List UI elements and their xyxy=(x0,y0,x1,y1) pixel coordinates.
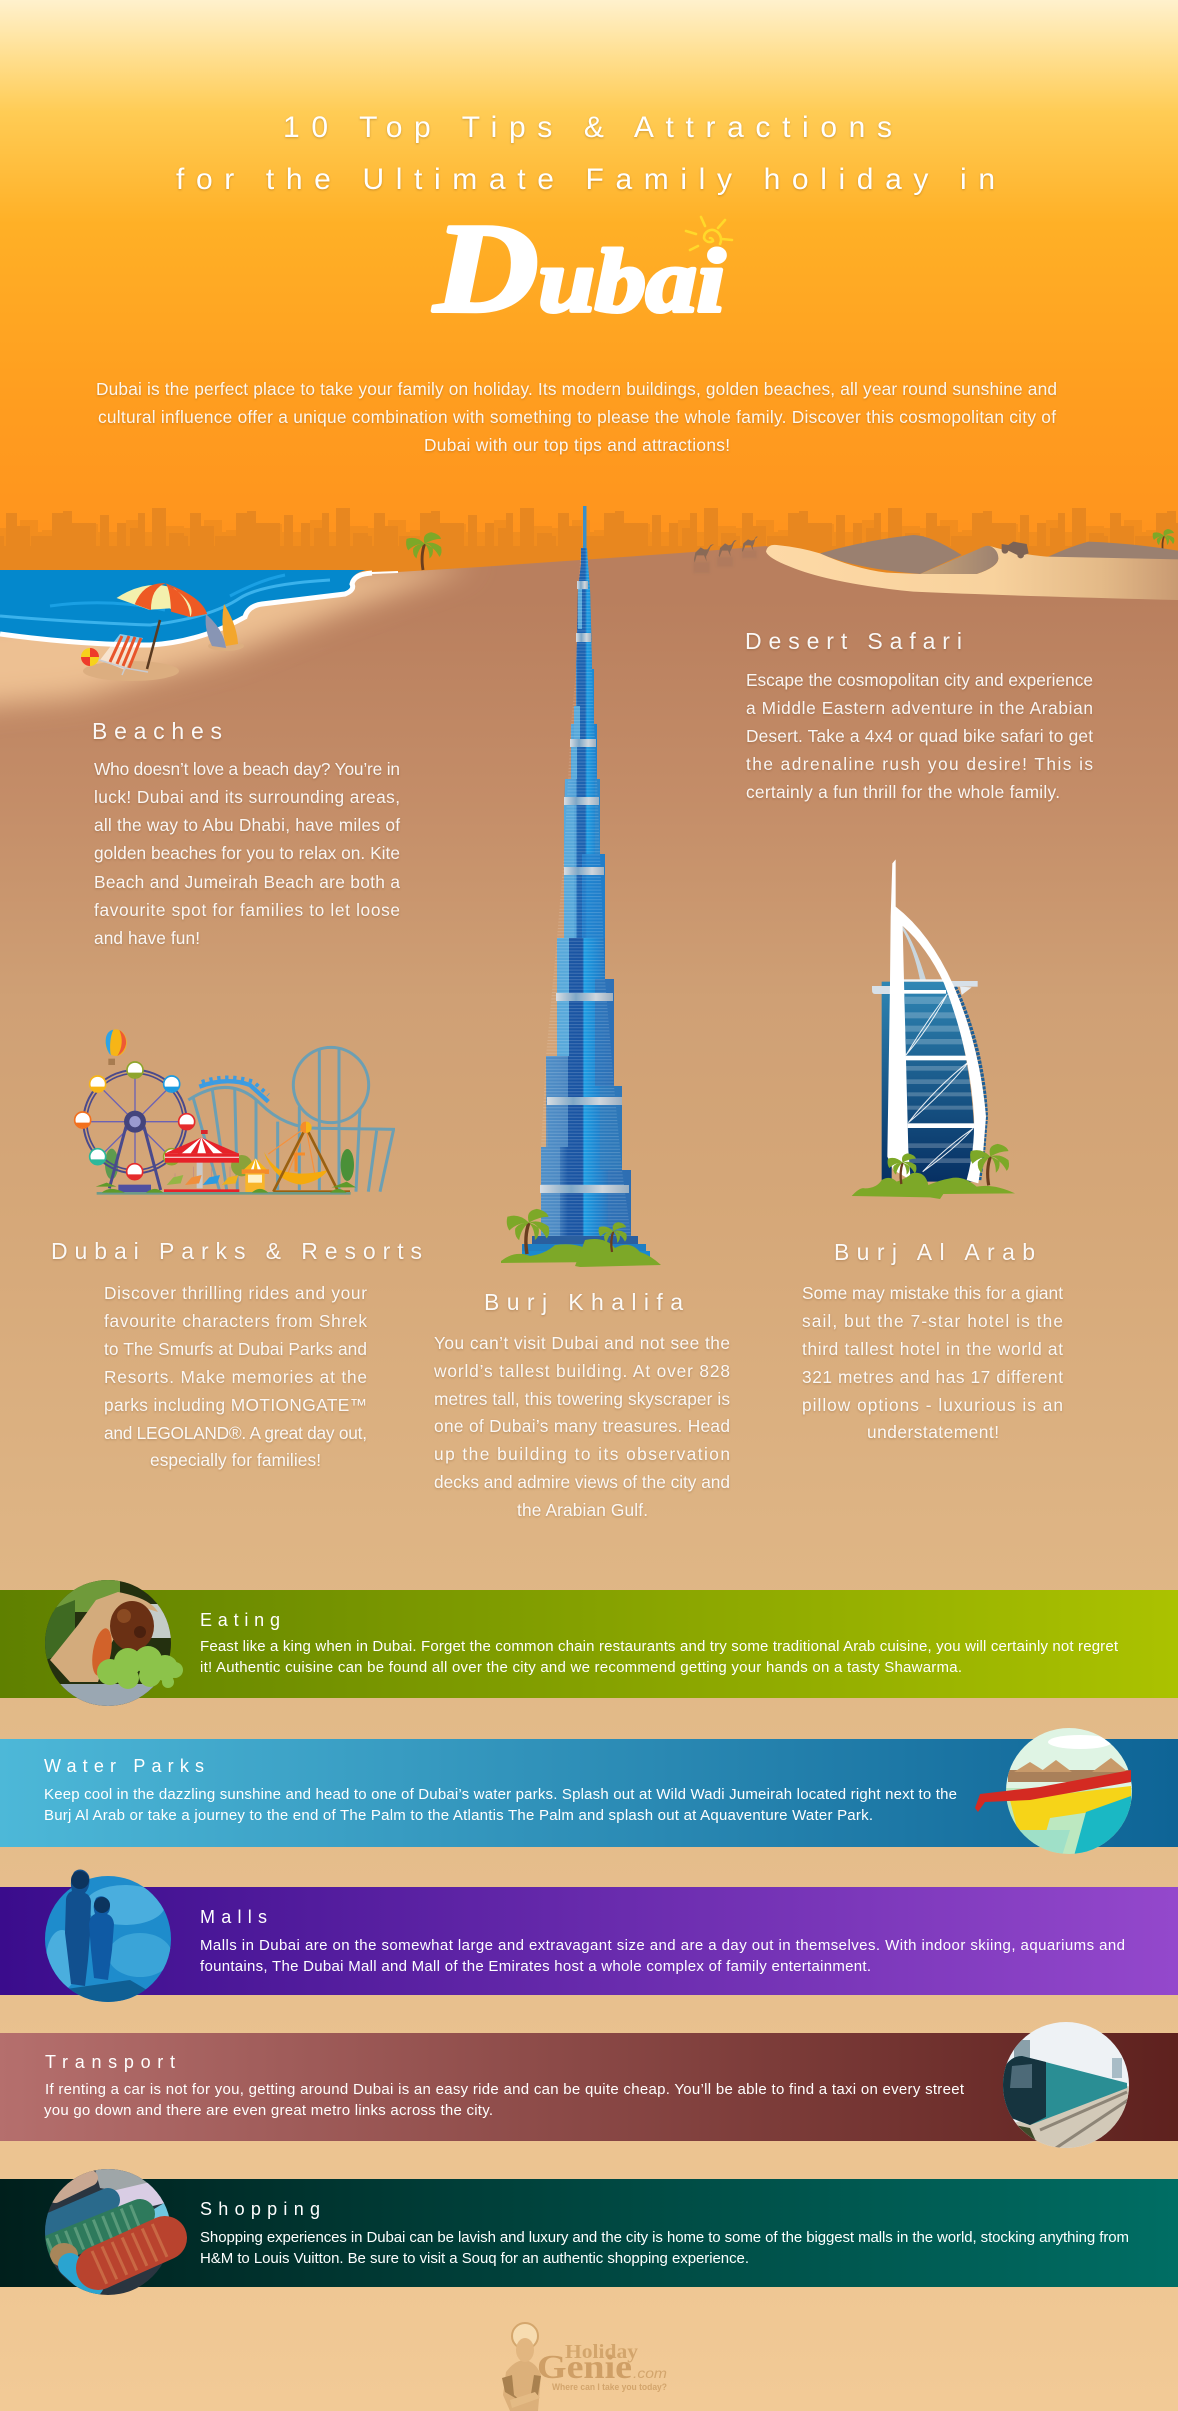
panel: Shopping xyxy=(0,2169,1178,2297)
section: Burj Khalifa: world’s tallest building. At over 828 xyxy=(433,1361,730,1381)
Transport title: Transport xyxy=(45,2052,175,2072)
section: Dubai Parks & Resorts: favourite characters from Shrek xyxy=(104,1311,367,1331)
Water Parks text: Keep cool in the dazzling sunshine and head to one of Dubai’s water parks. Splash out at Wild Wadi Jumeirah located right next to the xyxy=(44,1786,957,1803)
illustration: Burj Khalifa xyxy=(501,506,661,1267)
icon: genie xyxy=(502,2323,541,2411)
Malls text xyxy=(200,1937,1125,1975)
photo: metro train xyxy=(1000,2020,1135,2150)
section: Dubai Parks & Resorts: Dubai Parks & Resorts xyxy=(51,1238,422,1264)
photo: rolled fabrics xyxy=(45,2169,171,2297)
mountains xyxy=(820,535,1178,574)
carousel xyxy=(164,1130,239,1193)
section: Burj Khalifa: You can’t visit Dubai and not see the xyxy=(434,1333,730,1353)
intro text: cultural influence offer a unique combination with something to please the whole family. Discover this cosmopolitan city of xyxy=(98,407,1056,427)
light beach sand xyxy=(0,562,475,712)
Transport text xyxy=(44,2081,965,2119)
ticket booth xyxy=(242,1158,269,1193)
photo: water slides xyxy=(975,1728,1133,1856)
ground and shrubs xyxy=(96,1182,356,1195)
sand ground xyxy=(0,546,1178,2411)
sand dune xyxy=(766,545,1178,600)
section: Beaches: luck! Dubai and its surrounding areas, xyxy=(94,787,400,807)
section: Burj Al Arab: pillow options - luxurious is an xyxy=(802,1395,1063,1415)
Water Parks title: Water Parks xyxy=(44,1756,204,1776)
Eating text: it! Authentic cuisine can be found all over the city and we recommend getting your hands on a tasty Shawarma. xyxy=(200,1659,962,1676)
section: Burj Al Arab xyxy=(802,1239,1063,1442)
icon: jeep xyxy=(1002,542,1029,558)
logo text: .com xyxy=(633,2365,667,2381)
section: Beaches: golden beaches for you to relax on. Kite xyxy=(94,843,400,863)
section: Burj Khalifa: one of Dubai’s many treasures. Head xyxy=(434,1416,730,1436)
city skyline xyxy=(0,500,1178,590)
ferris wheel xyxy=(75,1062,195,1192)
Transport text: If renting a car is not for you, getting around Dubai is an easy ride and can be quite cheap. You’ll be able to find a taxi on every street xyxy=(45,2081,965,2098)
section: Burj Al Arab: 321 metres and has 17 different xyxy=(802,1367,1063,1387)
main title: 10 Top Tips & Attractions xyxy=(283,111,892,144)
intro text xyxy=(96,379,1057,455)
sky background xyxy=(0,0,1178,600)
main title: for the Ultimate Family holiday in xyxy=(176,163,995,196)
section: Burj Khalifa: decks and admire views of the city and xyxy=(434,1472,730,1492)
hot air balloon xyxy=(105,1029,127,1065)
section: Dubai Parks & Resorts: parks including MOTIONGATE™ xyxy=(104,1395,367,1415)
panel: Eating xyxy=(0,1580,1178,1708)
section: Burj Khalifa xyxy=(433,1289,730,1520)
Eating title: Eating xyxy=(200,1610,280,1630)
section: Desert Safari: a Middle Eastern adventure in the Arabian xyxy=(746,698,1093,718)
lettuce xyxy=(97,1646,183,1689)
section: Beaches: Beaches xyxy=(92,718,222,744)
logo text: Where can I take you today? xyxy=(552,2382,667,2392)
intro text: Dubai with our top tips and attractions! xyxy=(424,435,730,455)
Holiday Genie logo xyxy=(502,2323,667,2411)
camel reflections xyxy=(693,550,757,573)
section: Dubai Parks & Resorts: especially for families! xyxy=(150,1450,321,1470)
section: Beaches: Who doesn’t love a beach day? You’re in xyxy=(94,759,400,779)
pirate ship swing xyxy=(264,1122,350,1193)
photo: shawarma xyxy=(45,1580,183,1708)
beach scene: parasol, deck chair, ball and surfboards xyxy=(81,575,244,681)
Eating text: Feast like a king when in Dubai. Forget the common chain restaurants and try some traditional Arab cuisine, you will certainly not regret xyxy=(200,1638,1119,1655)
main title xyxy=(176,111,995,196)
illustration: theme park rides xyxy=(75,1029,395,1195)
section: Beaches xyxy=(92,718,400,948)
Dubai script wordmark: Dubai xyxy=(433,197,725,339)
section: Burj Khalifa: up the building to its observation xyxy=(434,1444,730,1464)
Shopping title: Shopping xyxy=(200,2199,320,2219)
Malls text: fountains, The Dubai Mall and Mall of the Emirates host a whole complex of family entertainment. xyxy=(200,1958,871,1975)
illustration: Burj Al Arab xyxy=(852,859,1015,1199)
logo text: Holiday xyxy=(565,2341,638,2363)
section: Dubai Parks & Resorts xyxy=(51,1238,422,1470)
intro text: Dubai is the perfect place to take your family on holiday. Its modern buildings, golden beaches, all year round sunshine and xyxy=(96,379,1057,399)
section: Burj Al Arab: understatement! xyxy=(867,1422,999,1442)
Malls title: Malls xyxy=(200,1907,267,1927)
trees xyxy=(105,1149,118,1179)
small dune xyxy=(920,546,998,574)
section: Dubai Parks & Resorts: and LEGOLAND®. A great day out, xyxy=(104,1423,367,1443)
section: Burj Khalifa: metres tall, this towering skyscraper is xyxy=(434,1389,730,1409)
desert: mountains, dunes, jeep and camels xyxy=(693,535,1178,600)
section: Desert Safari: certainly a fun thrill for the whole family. xyxy=(746,782,1060,802)
section: Desert Safari: Desert Safari xyxy=(745,628,962,654)
children silhouettes xyxy=(65,1869,114,1986)
Shopping text xyxy=(200,2229,1129,2267)
panel: Malls xyxy=(0,1869,1178,2004)
section: Beaches: and have fun! xyxy=(94,928,200,948)
section: Desert Safari: the adrenaline rush you desire! This is xyxy=(746,754,1093,774)
Water Parks text xyxy=(44,1786,957,1824)
section: Desert Safari xyxy=(745,628,1093,802)
section: Beaches: favourite spot for families to let loose xyxy=(94,900,400,920)
Water Parks text: Burj Al Arab or take a journey to the end of The Palm to the Atlantis The Palm and splash out at Aquaventure Water Park. xyxy=(44,1807,873,1824)
section: Dubai Parks & Resorts: Discover thrilling rides and your xyxy=(104,1283,367,1303)
section: Burj Khalifa: Burj Khalifa xyxy=(484,1289,683,1315)
Shopping text: H&M to Louis Vuitton. Be sure to visit a Souq for an authentic shopping experience. xyxy=(200,2250,749,2267)
section: Burj Al Arab: third tallest hotel in the world at xyxy=(802,1339,1063,1359)
section: Dubai Parks & Resorts: to The Smurfs at Dubai Parks and xyxy=(104,1339,367,1359)
camel silhouettes xyxy=(694,537,758,563)
icon: sun xyxy=(686,217,732,250)
logo text xyxy=(537,2341,667,2392)
sea and shoreline xyxy=(0,570,398,645)
Transport text: you go down and there are even great metro links across the city. xyxy=(44,2102,493,2119)
section: Beaches: all the way to Abu Dhabi, have miles of xyxy=(94,815,400,835)
logo text: Genie xyxy=(537,2349,632,2386)
Shopping text: Shopping experiences in Dubai can be lavish and luxury and the city is home to some of the biggest malls in the world, stocking anything from xyxy=(200,2229,1129,2246)
section: Burj Al Arab: Some may mistake this for a giant xyxy=(802,1283,1063,1303)
panel: Transport xyxy=(0,2020,1178,2150)
Malls text: Malls in Dubai are on the somewhat large and extravagant size and are a day out in themselves. With indoor skiing, aquariums and xyxy=(200,1937,1125,1954)
section: Burj Al Arab: Burj Al Arab xyxy=(834,1239,1035,1265)
roller coaster xyxy=(188,1047,395,1192)
section: Dubai Parks & Resorts: Resorts. Make memories at the xyxy=(104,1367,367,1387)
photo: children at aquarium xyxy=(45,1869,172,2004)
section: Burj Al Arab: sail, but the 7-star hotel is the xyxy=(802,1311,1063,1331)
section: Desert Safari: Escape the cosmopolitan city and experience xyxy=(746,670,1093,690)
section: Burj Khalifa: the Arabian Gulf. xyxy=(517,1500,648,1520)
palm tree: far right xyxy=(1153,529,1174,552)
palm tree: beach horizon xyxy=(406,532,442,570)
section: Beaches: Beach and Jumeirah Beach are both a xyxy=(94,872,400,892)
panel: Water Parks xyxy=(0,1728,1178,1856)
Eating text xyxy=(200,1638,1119,1676)
section: Desert Safari: Desert. Take a 4x4 or quad bike safari to get xyxy=(746,726,1093,746)
